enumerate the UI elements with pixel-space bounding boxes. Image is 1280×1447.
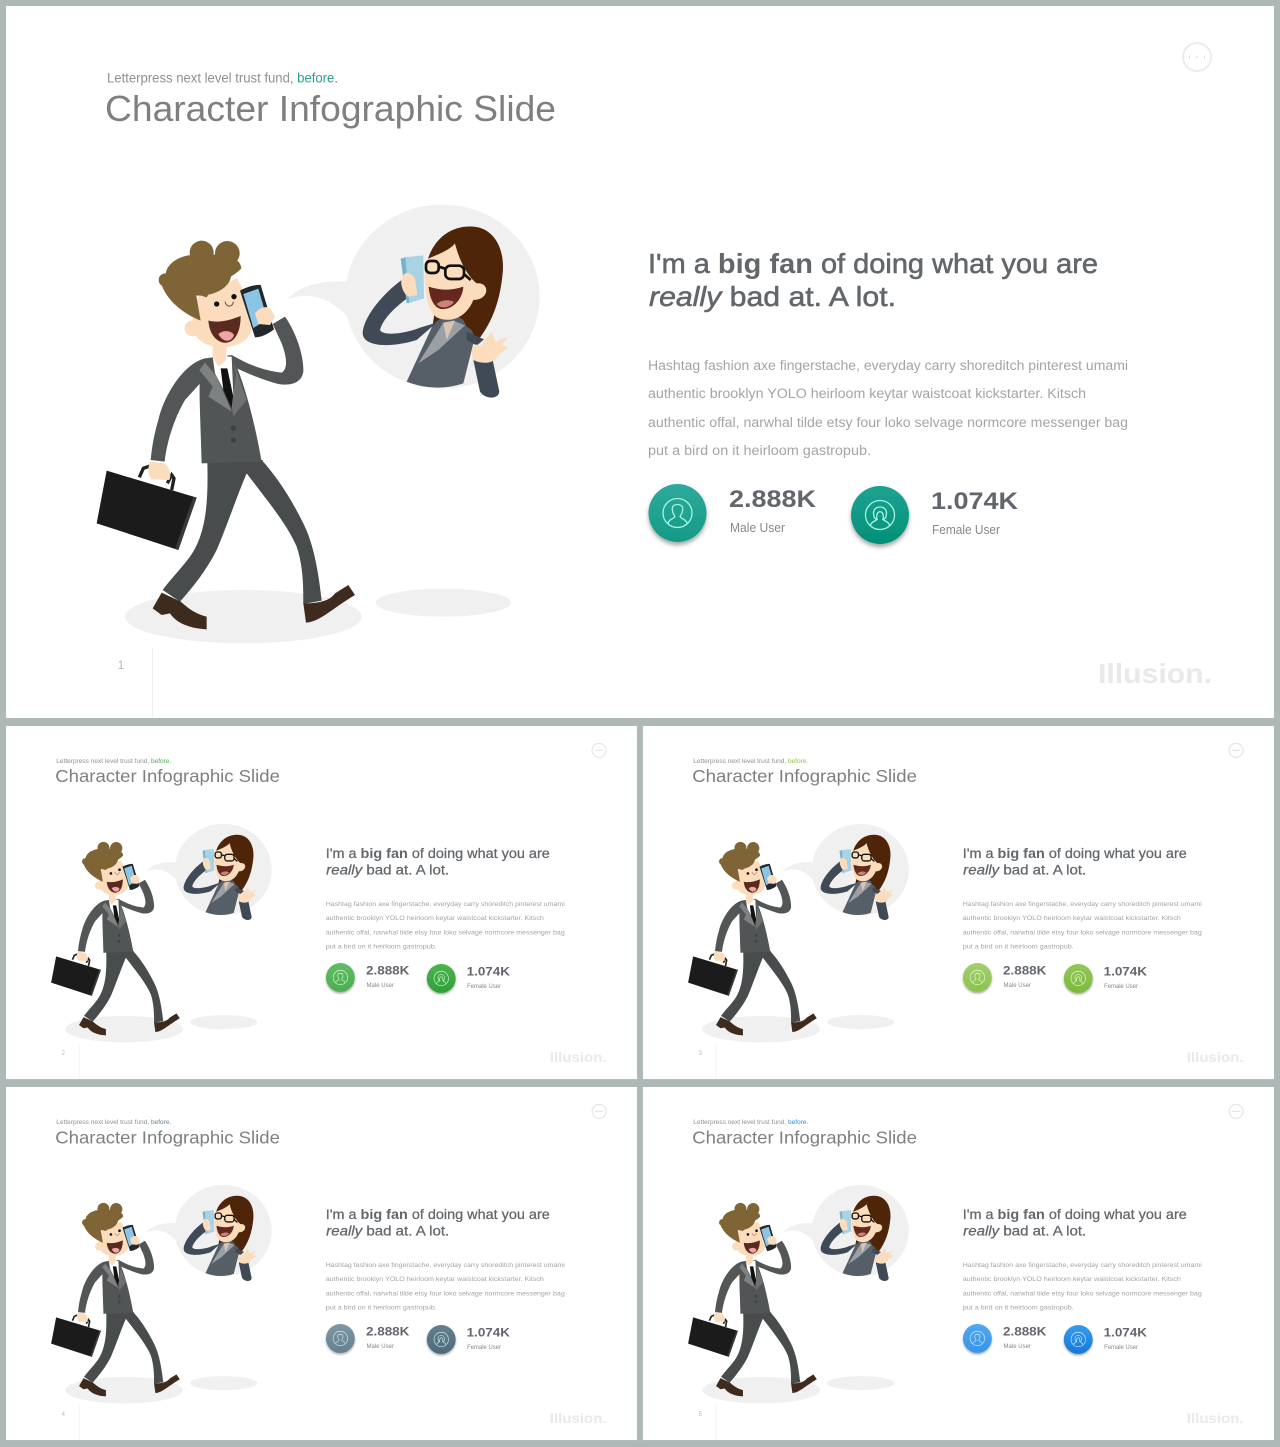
body text: authentic brooklyn YOLO heirloom keytar waistcoat kickstarter. Kitsch: [326, 1276, 544, 1283]
stat: female users: 1.074K: [1104, 964, 1147, 978]
body text: [963, 1262, 1202, 1312]
illustration: [688, 1185, 909, 1403]
heading second line: really bad at. A lot.: [649, 281, 896, 312]
body text: put a bird on it heirloom gastropub.: [963, 1305, 1074, 1312]
stat: female users: Female User: [1104, 983, 1139, 990]
heading second line: really bad at. A lot.: [326, 861, 449, 877]
body text: authentic brooklyn YOLO heirloom keytar waistcoat kickstarter. Kitsch: [326, 915, 544, 922]
heading: I'm a big fan of doing what you are: [326, 845, 550, 861]
brand: Illusion.: [550, 1049, 607, 1065]
subtitle: Letterpress next level trust fund, before.: [693, 1119, 808, 1126]
subtitle: Letterpress next level trust fund, before.: [56, 1119, 171, 1126]
body text: put a bird on it heirloom gastropub.: [963, 944, 1074, 951]
page number: 3: [699, 1051, 703, 1057]
heading second line: really bad at. A lot.: [963, 861, 1086, 877]
illustration: [688, 824, 909, 1042]
stat: female users: 1.074K: [931, 488, 1019, 515]
brand: Illusion.: [1187, 1049, 1244, 1065]
brand: Illusion.: [550, 1410, 607, 1426]
heading second line: really bad at. A lot.: [963, 1222, 1086, 1238]
stat: female users: 1.074K: [1104, 1325, 1147, 1339]
stat: female users: Female User: [467, 1344, 502, 1351]
heading: I'm a big fan of doing what you are: [648, 248, 1098, 279]
page number: 1: [118, 658, 125, 672]
stat: male users: Male User: [1004, 982, 1032, 989]
stat: male users: [648, 484, 817, 542]
illustration: businessman phoning businesswoman: [97, 205, 540, 643]
icon: menu dots: [592, 743, 606, 757]
stat: female users: Female User: [932, 522, 1001, 537]
heading second line: really bad at. A lot.: [326, 1222, 449, 1238]
body text: [648, 358, 1128, 458]
title: Character Infographic Slide: [55, 766, 280, 786]
body text: authentic offal, narwhal tilde etsy four loko selvage normcore messenger bag: [963, 1291, 1202, 1298]
body text: put a bird on it heirloom gastropub.: [326, 944, 437, 951]
body text: put a bird on it heirloom gastropub.: [326, 1305, 437, 1312]
stat: female users: [851, 486, 1019, 544]
body text: [326, 1262, 565, 1312]
stat: female users: [1064, 1325, 1147, 1354]
body text: [963, 901, 1202, 951]
body text: Hashtag fashion axe fingerstache, everyday carry shoreditch pinterest umami: [963, 1262, 1202, 1269]
body text: authentic offal, narwhal tilde etsy four loko selvage normcore messenger bag: [326, 930, 565, 937]
subtitle: Letterpress next level trust fund, before.: [56, 758, 171, 765]
body text: [326, 901, 565, 951]
title: Character Infographic Slide: [105, 88, 556, 129]
body text: authentic brooklyn YOLO heirloom keytar waistcoat kickstarter. Kitsch: [648, 386, 1086, 401]
icon: menu dots: [1229, 1104, 1243, 1118]
panel: slide 4, slate: [6, 1087, 637, 1440]
body text: authentic offal, narwhal tilde etsy four loko selvage normcore messenger bag: [648, 415, 1128, 430]
brand: Illusion.: [1098, 658, 1212, 689]
title: Character Infographic Slide: [55, 1127, 280, 1147]
panel: main slide, teal: [6, 6, 1274, 718]
stat: male users: 2.888K: [366, 1324, 410, 1338]
stat: female users: [1064, 964, 1147, 993]
illustration: [51, 1185, 272, 1403]
brand: Illusion.: [1187, 1410, 1244, 1426]
stat: male users: [326, 1324, 410, 1353]
heading: I'm a big fan of doing what you are: [963, 845, 1187, 861]
stat: male users: 2.888K: [1003, 1324, 1047, 1338]
body text: Hashtag fashion axe fingerstache, everyday carry shoreditch pinterest umami: [326, 901, 565, 908]
stat: female users: [427, 964, 510, 993]
icon: menu dots: [1183, 43, 1211, 71]
stat: male users: [326, 963, 410, 992]
stat: male users: Male User: [367, 982, 395, 989]
panel: slide 2, green: [6, 726, 637, 1079]
icon: menu dots: [592, 1104, 606, 1118]
page number: 2: [62, 1051, 66, 1057]
stat: male users: [963, 1324, 1047, 1353]
body text: authentic offal, narwhal tilde etsy four loko selvage normcore messenger bag: [326, 1291, 565, 1298]
body text: authentic offal, narwhal tilde etsy four loko selvage normcore messenger bag: [963, 930, 1202, 937]
title: Character Infographic Slide: [692, 766, 917, 786]
icon: menu dots: [1229, 743, 1243, 757]
body text: Hashtag fashion axe fingerstache, everyday carry shoreditch pinterest umami: [326, 1262, 565, 1269]
stat: female users: Female User: [467, 983, 502, 990]
title: Character Infographic Slide: [692, 1127, 917, 1147]
stat: male users: Male User: [367, 1343, 395, 1350]
stat: male users: 2.888K: [1003, 963, 1047, 977]
stat: male users: [963, 963, 1047, 992]
page number: 4: [62, 1412, 66, 1418]
illustration: [51, 824, 272, 1042]
body text: Hashtag fashion axe fingerstache, everyday carry shoreditch pinterest umami: [648, 358, 1128, 373]
subtitle: Letterpress next level trust fund, before.: [693, 758, 808, 765]
body text: Hashtag fashion axe fingerstache, everyday carry shoreditch pinterest umami: [963, 901, 1202, 908]
subtitle: Letterpress next level trust fund, before.: [107, 70, 338, 86]
stat: female users: 1.074K: [467, 1325, 510, 1339]
stat: male users: Male User: [1004, 1343, 1032, 1350]
stat: male users: 2.888K: [366, 963, 410, 977]
stat: female users: [427, 1325, 510, 1354]
stat: female users: 1.074K: [467, 964, 510, 978]
panel: slide 5, blue: [643, 1087, 1274, 1440]
body text: put a bird on it heirloom gastropub.: [648, 443, 871, 458]
page number: 5: [699, 1412, 703, 1418]
stat: female users: Female User: [1104, 1344, 1139, 1351]
heading: I'm a big fan of doing what you are: [963, 1206, 1187, 1222]
stat: male users: Male User: [730, 520, 786, 535]
body text: authentic brooklyn YOLO heirloom keytar waistcoat kickstarter. Kitsch: [963, 1276, 1181, 1283]
stat: male users: 2.888K: [729, 486, 817, 513]
panel: slide 3, lime: [643, 726, 1274, 1079]
heading: I'm a big fan of doing what you are: [326, 1206, 550, 1222]
body text: authentic brooklyn YOLO heirloom keytar waistcoat kickstarter. Kitsch: [963, 915, 1181, 922]
